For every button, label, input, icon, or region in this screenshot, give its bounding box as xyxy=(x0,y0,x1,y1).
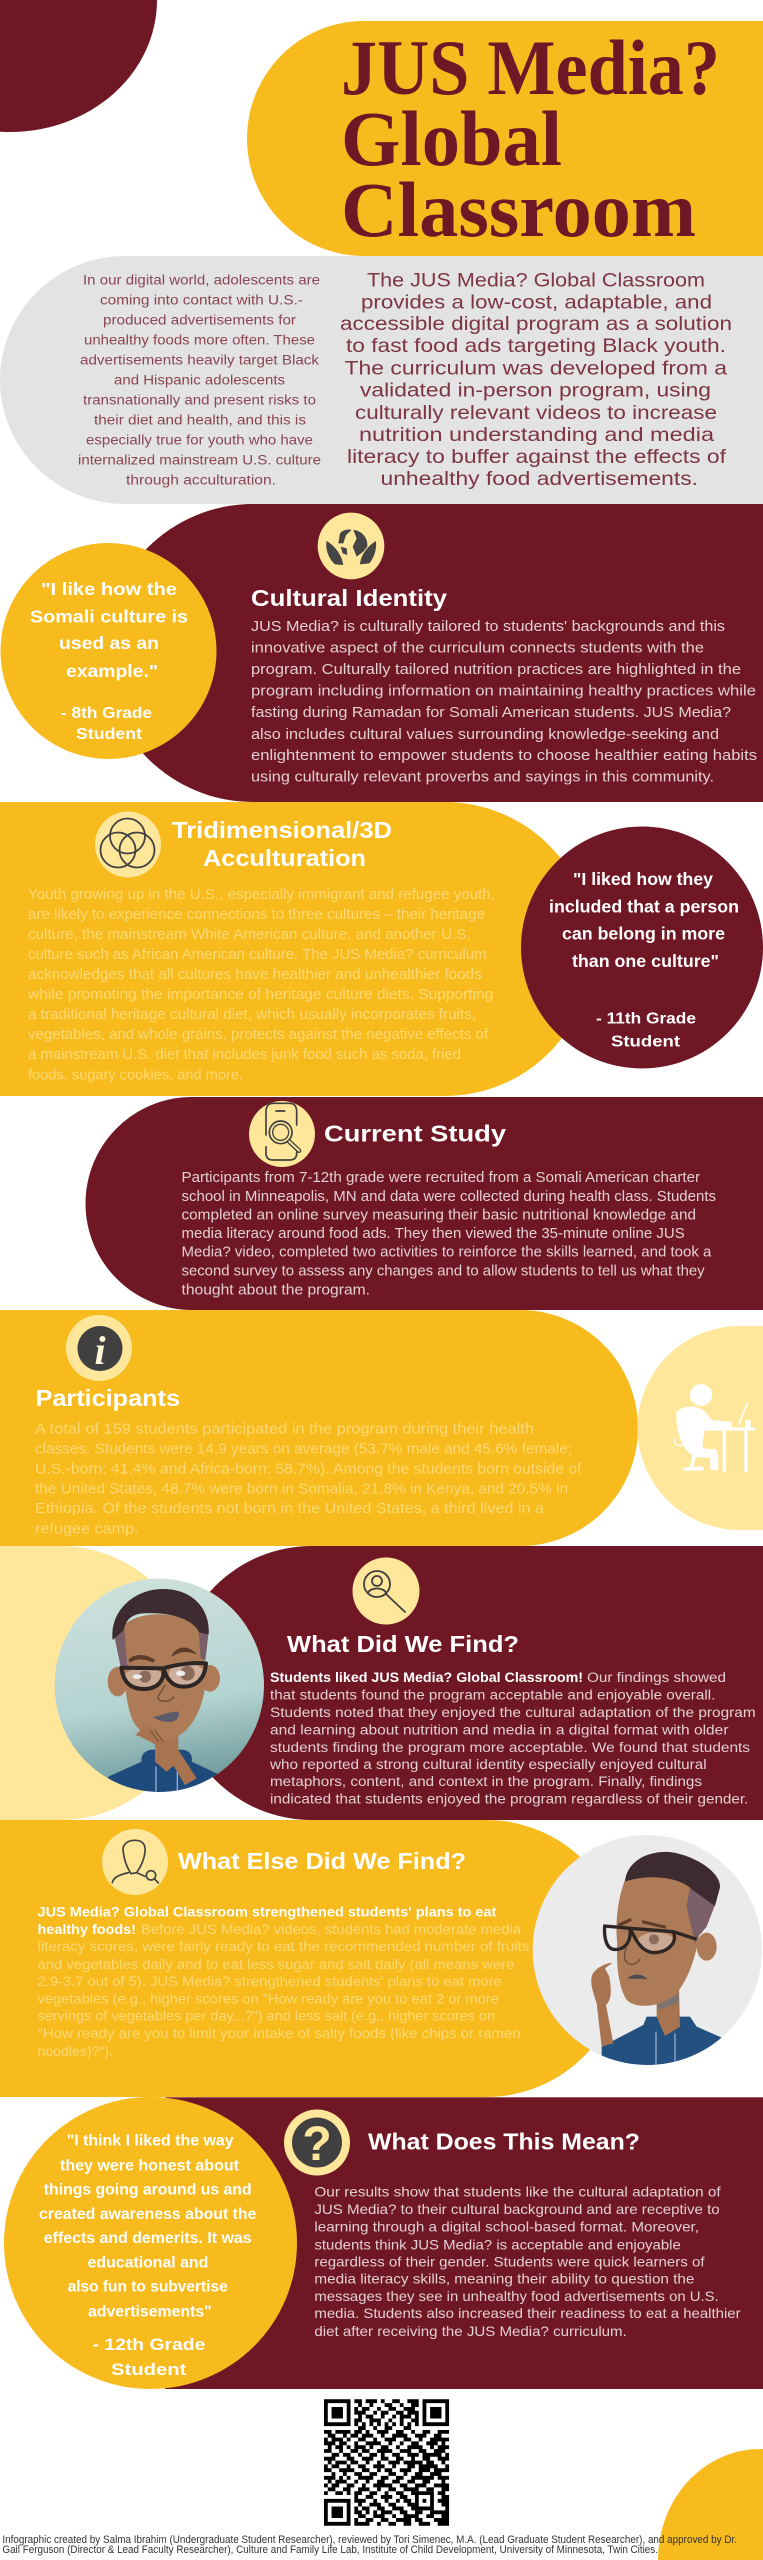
callout: 8th grade quote xyxy=(0,543,216,759)
text block: participants: refugee camp. xyxy=(35,1520,139,1537)
title panel: JUS Media? xyxy=(341,24,720,111)
callout: 8th grade quote: "I like how the xyxy=(41,579,177,599)
text block: participants: Ethiopia. Of the students not born in the United States, a third lived in a xyxy=(35,1500,545,1517)
text block: findings xyxy=(269,1670,756,1806)
callout: 12th grade quote: created awareness about the xyxy=(39,2206,257,2223)
heading: tridimensional acculturation: Tridimensional/3D xyxy=(172,817,392,843)
text block: further findings: "How ready are you to limit your intake of salty foods (like chips or ramen xyxy=(38,2026,521,2041)
text block: current study: school in Minneapolis, MN and data were collected during health class. Students xyxy=(182,1189,716,1205)
panel: participants xyxy=(0,1310,638,1546)
callout: 8th grade quote: example." xyxy=(66,661,158,681)
text block: participants: the United States, 48.7% were born in Somalia, 21.8% in Kenya, and 20.5% in xyxy=(35,1480,568,1497)
icon: three overlapping circles xyxy=(95,812,161,878)
callout: 11th grade quote: "I liked how they xyxy=(573,869,713,889)
text block: further findings: literacy scores, were fairly ready to eat the recommended number of fruits xyxy=(38,1939,530,1954)
panel: cultural identity xyxy=(104,504,763,802)
text block: cultural identity xyxy=(251,618,757,786)
text block: participants: A total of 159 students participated in the program during their health xyxy=(35,1420,534,1437)
text block: further findings: 2.9-3.7 out of 5). JUS Media? strengthened students' plans to eat more xyxy=(38,1974,502,1989)
text block: current study: completed an online survey measuring their basic nutritional knowledge and xyxy=(182,1207,696,1223)
text block: digital world: especially true for youth who have xyxy=(86,433,313,448)
callout: 12th grade quote: Student xyxy=(111,2360,187,2379)
text block: digital world: internalized mainstream U.S. culture xyxy=(78,453,321,468)
heading: participants: Participants xyxy=(36,1385,180,1411)
text block: cultural identity: enlightenment to empower students to choose healthier eating habits xyxy=(251,747,757,764)
callout: 11th grade quote: - 11th Grade xyxy=(596,1010,696,1028)
text block: digital world: and Hispanic adolescents xyxy=(114,373,285,388)
callout: 12th grade quote: "I think I liked the way xyxy=(67,2133,234,2150)
text block: further findings: vegetables (e.g., higher scores on "How ready are you to eat 2 or more xyxy=(38,1992,499,2007)
icon: globe in hands xyxy=(318,513,384,579)
text block: findings: students finding the program more acceptable. We found that students xyxy=(270,1740,750,1755)
callout: 12th grade quote: also fun to subvertise xyxy=(68,2279,228,2296)
icon: phone with magnifier xyxy=(249,1101,315,1167)
text block: program summary: accessible digital program as a solution xyxy=(340,313,732,335)
callout: 11th grade quote: than one culture" xyxy=(572,951,719,971)
text block: program summary: provides a low-cost, adaptable, and xyxy=(361,291,712,313)
callout: 12th grade quote: - 12th Grade xyxy=(92,2335,205,2354)
icon: information: i xyxy=(94,1328,106,1373)
text block: cultural identity: JUS Media? is culturally tailored to students' backgrounds and this xyxy=(251,618,725,635)
text block: acculturation: vegetables, and whole grains, protects against the negative effects of xyxy=(28,1026,489,1043)
text block: current study: Media? video, completed two activities to reinforce the skills learned, and took a xyxy=(182,1245,712,1261)
text block: cultural identity: program. Culturally tailored nutrition practices are highlighted in the xyxy=(251,661,741,678)
text block: digital world: through acculturation. xyxy=(126,473,276,488)
text block: findings: indicated that students enjoyed the program regardless of their gender. xyxy=(270,1791,748,1806)
text block: acculturation: while promoting the importance of heritage culture diets. Supporting xyxy=(27,986,493,1003)
panel: tridimensional acculturation xyxy=(0,802,592,1096)
callout: 8th grade quote: - 8th Grade xyxy=(61,705,152,722)
text block: findings: Our findings showed xyxy=(587,1670,726,1685)
panel: introduction xyxy=(0,256,763,504)
decorative maroon blob top-left xyxy=(0,0,157,132)
text block: acculturation xyxy=(27,886,495,1083)
heading: tridimensional acculturation: Acculturation xyxy=(203,845,366,871)
text block: program summary: literacy to buffer against the effects of xyxy=(347,446,727,468)
callout: 12th grade quote: effects and demerits. It was xyxy=(44,2230,252,2247)
icon: information xyxy=(66,1315,132,1381)
decorative yellow blob bottom-right xyxy=(658,2449,763,2560)
panel: what did we find xyxy=(175,1546,763,1820)
text block: program summary: unhealthy food advertisements. xyxy=(380,468,698,490)
text block: meaning xyxy=(314,2184,741,2339)
callout: 11th grade quote xyxy=(521,826,763,1068)
panel: current study xyxy=(86,1097,763,1310)
text block: program summary: to fast food ads targeting Black youth. xyxy=(346,335,726,357)
icon: question mark xyxy=(284,2110,350,2176)
text block: digital world xyxy=(78,273,321,488)
text block: further findings xyxy=(38,1905,530,2059)
text block: digital world: In our digital world, adolescents are xyxy=(83,273,320,288)
text block: program summary: culturally relevant videos to increase xyxy=(355,402,717,424)
text block: program summary: The JUS Media? Global Classroom xyxy=(367,269,705,291)
text block: acculturation: foods, sugary cookies, and more. xyxy=(28,1066,243,1083)
heading: current study: Current Study xyxy=(324,1121,506,1147)
text block: meaning: learning through a digital school-based format. Moreover, xyxy=(314,2218,699,2234)
text block: findings: metaphors, content, and context in the program. Finally, findings xyxy=(270,1774,702,1789)
callout: 11th grade quote: Student xyxy=(611,1034,680,1050)
text block: acculturation: culture such as African American culture. The JUS Media? curriculum xyxy=(28,946,487,963)
text block: findings: Students liked JUS Media? Global Classroom! xyxy=(270,1670,583,1685)
text block: current study: thought about the program. xyxy=(182,1282,370,1298)
text block: participants: classes. Students were 14.9 years on average (53.7% male and 45.6% female; xyxy=(35,1440,572,1457)
text block: digital world: transnationally and present risks to xyxy=(83,393,316,408)
text block: meaning: media literacy skills, meaning their ability to question the xyxy=(314,2271,695,2287)
text block: findings: and learning about nutrition and media in a digital format with older xyxy=(270,1723,729,1738)
text block: program summary: validated in-person program, using xyxy=(360,379,711,401)
callout: 12th grade quote xyxy=(4,2097,297,2389)
heading: what did we find: What Did We Find? xyxy=(287,1631,519,1657)
callout: 12th grade quote: educational and xyxy=(88,2255,208,2272)
title panel: Classroom xyxy=(341,166,696,253)
text block: further findings: noodles)?"). xyxy=(38,2044,113,2059)
callout: 11th grade quote: can belong in more xyxy=(562,924,725,944)
text block: program summary xyxy=(340,269,732,490)
text block: digital world: their diet and health, and this is xyxy=(94,413,306,428)
footer credits xyxy=(2,2534,737,2556)
text block: further findings: JUS Media? Global Classroom strengthened students' plans to eat xyxy=(38,1905,497,1920)
text block: digital world: produced advertisements for xyxy=(103,313,297,328)
text block: digital world: advertisements heavily target Black xyxy=(80,353,319,368)
text block: acculturation: culture, the mainstream White American culture, and another U.S. xyxy=(28,926,470,943)
text block: further findings: Before JUS Media? videos, students had moderate media xyxy=(141,1922,522,1937)
text block: acculturation: are likely to experience connections to three cultures – their heritage xyxy=(28,906,485,923)
text block: further findings: and vegetables daily and to eat less sugar and salt daily (all means were xyxy=(38,1957,514,1972)
callout: 8th grade quote: Somali culture is xyxy=(30,606,188,626)
callout: 8th grade quote: Student xyxy=(76,726,142,743)
text block: program summary: The curriculum was developed from a xyxy=(344,357,727,379)
heading: what else did we find: What Else Did We Find? xyxy=(178,1848,466,1874)
text block: meaning: messages they see in unhealthy food advertisements on U.S. xyxy=(314,2288,719,2304)
icon: magnifier over person xyxy=(352,1558,420,1624)
text block: cultural identity: fasting during Ramadan for Somali American students. JUS Media? xyxy=(251,704,731,721)
text block: cultural identity: program including information on maintaining healthy practices while xyxy=(251,683,756,700)
text block: digital world: coming into contact with U.S.- xyxy=(100,293,303,308)
callout: 8th grade quote: used as an xyxy=(59,633,159,653)
callout: 12th grade quote: things going around us and xyxy=(44,2181,252,2198)
heading: cultural identity: Cultural Identity xyxy=(251,585,447,611)
text block: current study: Participants from 7-12th grade were recruited from a Somali American charter xyxy=(182,1170,700,1186)
panel: what does this mean xyxy=(165,2097,763,2389)
text block: participants xyxy=(35,1420,582,1537)
text block: meaning: media. Students also increased their readiness to eat a healthier xyxy=(314,2305,741,2321)
icon: person outline with magnifier xyxy=(102,1829,168,1895)
text block: meaning: students think JUS Media? is acceptable and enjoyable xyxy=(314,2236,681,2252)
text block: cultural identity: using culturally relevant proverbs and sayings in this community. xyxy=(251,769,714,786)
text block: digital world: unhealthy foods more often. These xyxy=(84,333,315,348)
illustration: student looking worried xyxy=(533,1835,762,2070)
text block: further findings: servings of vegetables per day...?") and less salt (e.g., higher scores on xyxy=(38,2008,495,2024)
text block: findings: who reported a strong cultural identity especially enjoyed cultural xyxy=(269,1757,707,1772)
panel: what else did we find xyxy=(0,1820,625,2097)
text block: cultural identity: innovative aspect of the curriculum connects students with the xyxy=(251,640,704,657)
illustration: student thinking xyxy=(55,1579,264,1802)
callout: 12th grade quote: advertisements" xyxy=(88,2303,212,2320)
text block: meaning: diet after receiving the JUS Media? curriculum. xyxy=(314,2323,627,2339)
title panel: Global xyxy=(341,95,562,182)
heading: tridimensional acculturation xyxy=(172,817,392,871)
footer credits: Gail Ferguson (Director & Lead Faculty Researcher), Culture and Family Life Lab, Institute of Child Development, University of Minnesota, Twin Cities. xyxy=(2,2544,658,2556)
heading: what does this mean: What Does This Mean? xyxy=(368,2128,640,2154)
icon: student at desk xyxy=(638,1326,763,1530)
text block: findings: Students noted that they enjoyed the cultural adaptation of the program xyxy=(270,1705,756,1720)
text block: acculturation: a traditional heritage cultural diet, which usually incorporates fruits, xyxy=(28,1006,476,1023)
text block: cultural identity: also includes cultural values surrounding knowledge-seeking and xyxy=(251,726,719,743)
text block: meaning: regardless of their gender. Students were quick learners of xyxy=(314,2254,705,2270)
text block: current study: second survey to assess any changes and to allow students to tell us what they xyxy=(182,1263,705,1279)
title panel xyxy=(247,21,763,256)
text block: current study: media literacy around food ads. They then viewed the 35-minute online JUS xyxy=(182,1226,685,1242)
QR code xyxy=(324,2399,449,2526)
callout: 11th grade quote: included that a person xyxy=(549,896,739,916)
text block: findings: that students found the program acceptable and enjoyable overall. xyxy=(270,1688,715,1703)
text block: current study xyxy=(182,1170,716,1298)
decorative pale shape behind portrait xyxy=(0,1546,197,1820)
text block: meaning: JUS Media? to their cultural background and are receptive to xyxy=(314,2201,720,2217)
text block: program summary: nutrition understanding and media xyxy=(359,424,714,446)
text block: acculturation: Youth growing up in the U.S., especially immigrant and refugee youth, xyxy=(28,886,495,903)
text block: acculturation: a mainstream U.S. diet that includes junk food such as soda, fried xyxy=(28,1046,461,1063)
icon: question mark: ? xyxy=(302,2118,332,2171)
text block: meaning: Our results show that students like the cultural adaptation of xyxy=(314,2184,721,2200)
text block: participants: U.S.-born: 41.4% and Africa-born: 58.7%). Among the students born outside of xyxy=(35,1460,582,1477)
text block: further findings: healthy foods! xyxy=(38,1922,136,1937)
callout: 12th grade quote: they were honest about xyxy=(60,2158,240,2175)
text block: acculturation: acknowledges that all cultures have healthier and unhealthier foods xyxy=(28,966,482,983)
